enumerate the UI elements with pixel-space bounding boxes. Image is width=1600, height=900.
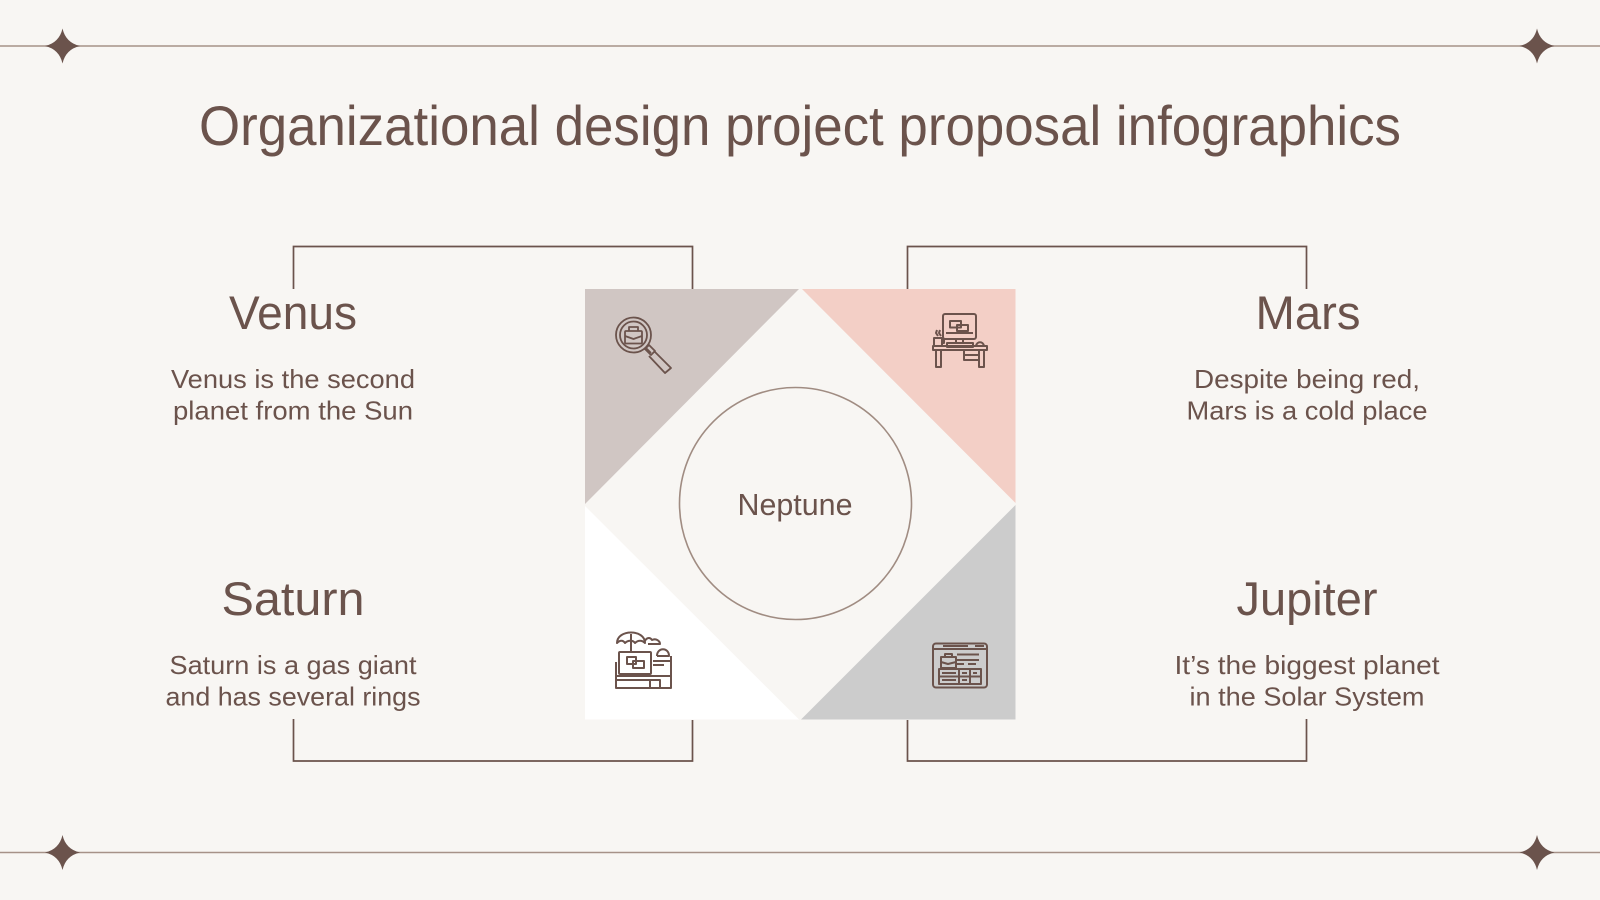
- star: top right: [1520, 28, 1554, 64]
- text: Venus description: planet from the Sun: [173, 396, 413, 426]
- connector: Mars: [908, 246, 1306, 289]
- quadrant: top left: [585, 289, 799, 504]
- center label: Neptune: [738, 487, 852, 522]
- text: Saturn description: Saturn is a gas giant: [170, 650, 417, 680]
- text: Venus description: Venus is the second: [171, 364, 415, 394]
- heading: Venus: Venus: [229, 286, 357, 339]
- text: Venus description: [171, 364, 415, 426]
- text: Mars description: Mars is a cold place: [1186, 396, 1428, 426]
- connector: Jupiter: [908, 719, 1306, 761]
- icon: computer desk: [933, 314, 987, 367]
- heading: Mars: Mars: [1256, 286, 1360, 339]
- text: Saturn description: and has several rings: [166, 682, 420, 712]
- star: top left: [45, 28, 80, 64]
- quadrant: top right: [802, 289, 1016, 503]
- quadrant: bottom left: [585, 506, 799, 720]
- text: Jupiter description: It’s the biggest planet: [1174, 650, 1440, 680]
- star: bottom left: [45, 835, 80, 870]
- text: Mars description: Despite being red,: [1194, 364, 1420, 394]
- icon: outdoor workstation: [616, 632, 671, 688]
- text: Jupiter description: [1174, 650, 1440, 712]
- text: Saturn description: [166, 650, 420, 712]
- connector: Venus: [294, 246, 692, 289]
- quadrant: bottom right: [801, 505, 1016, 720]
- heading: Jupiter: Jupiter: [1236, 572, 1378, 625]
- text: Mars description: [1186, 364, 1428, 426]
- text: Jupiter description: in the Solar System: [1190, 682, 1424, 712]
- title: Organizational design project proposal infographics: [199, 94, 1401, 157]
- heading: Saturn: Saturn: [222, 572, 364, 625]
- star: bottom right: [1520, 835, 1554, 870]
- icon: magnifier with briefcase: [616, 318, 671, 373]
- center circle: [680, 388, 912, 620]
- icon: browser window with briefcase: [933, 644, 987, 688]
- connector: Saturn: [294, 719, 692, 761]
